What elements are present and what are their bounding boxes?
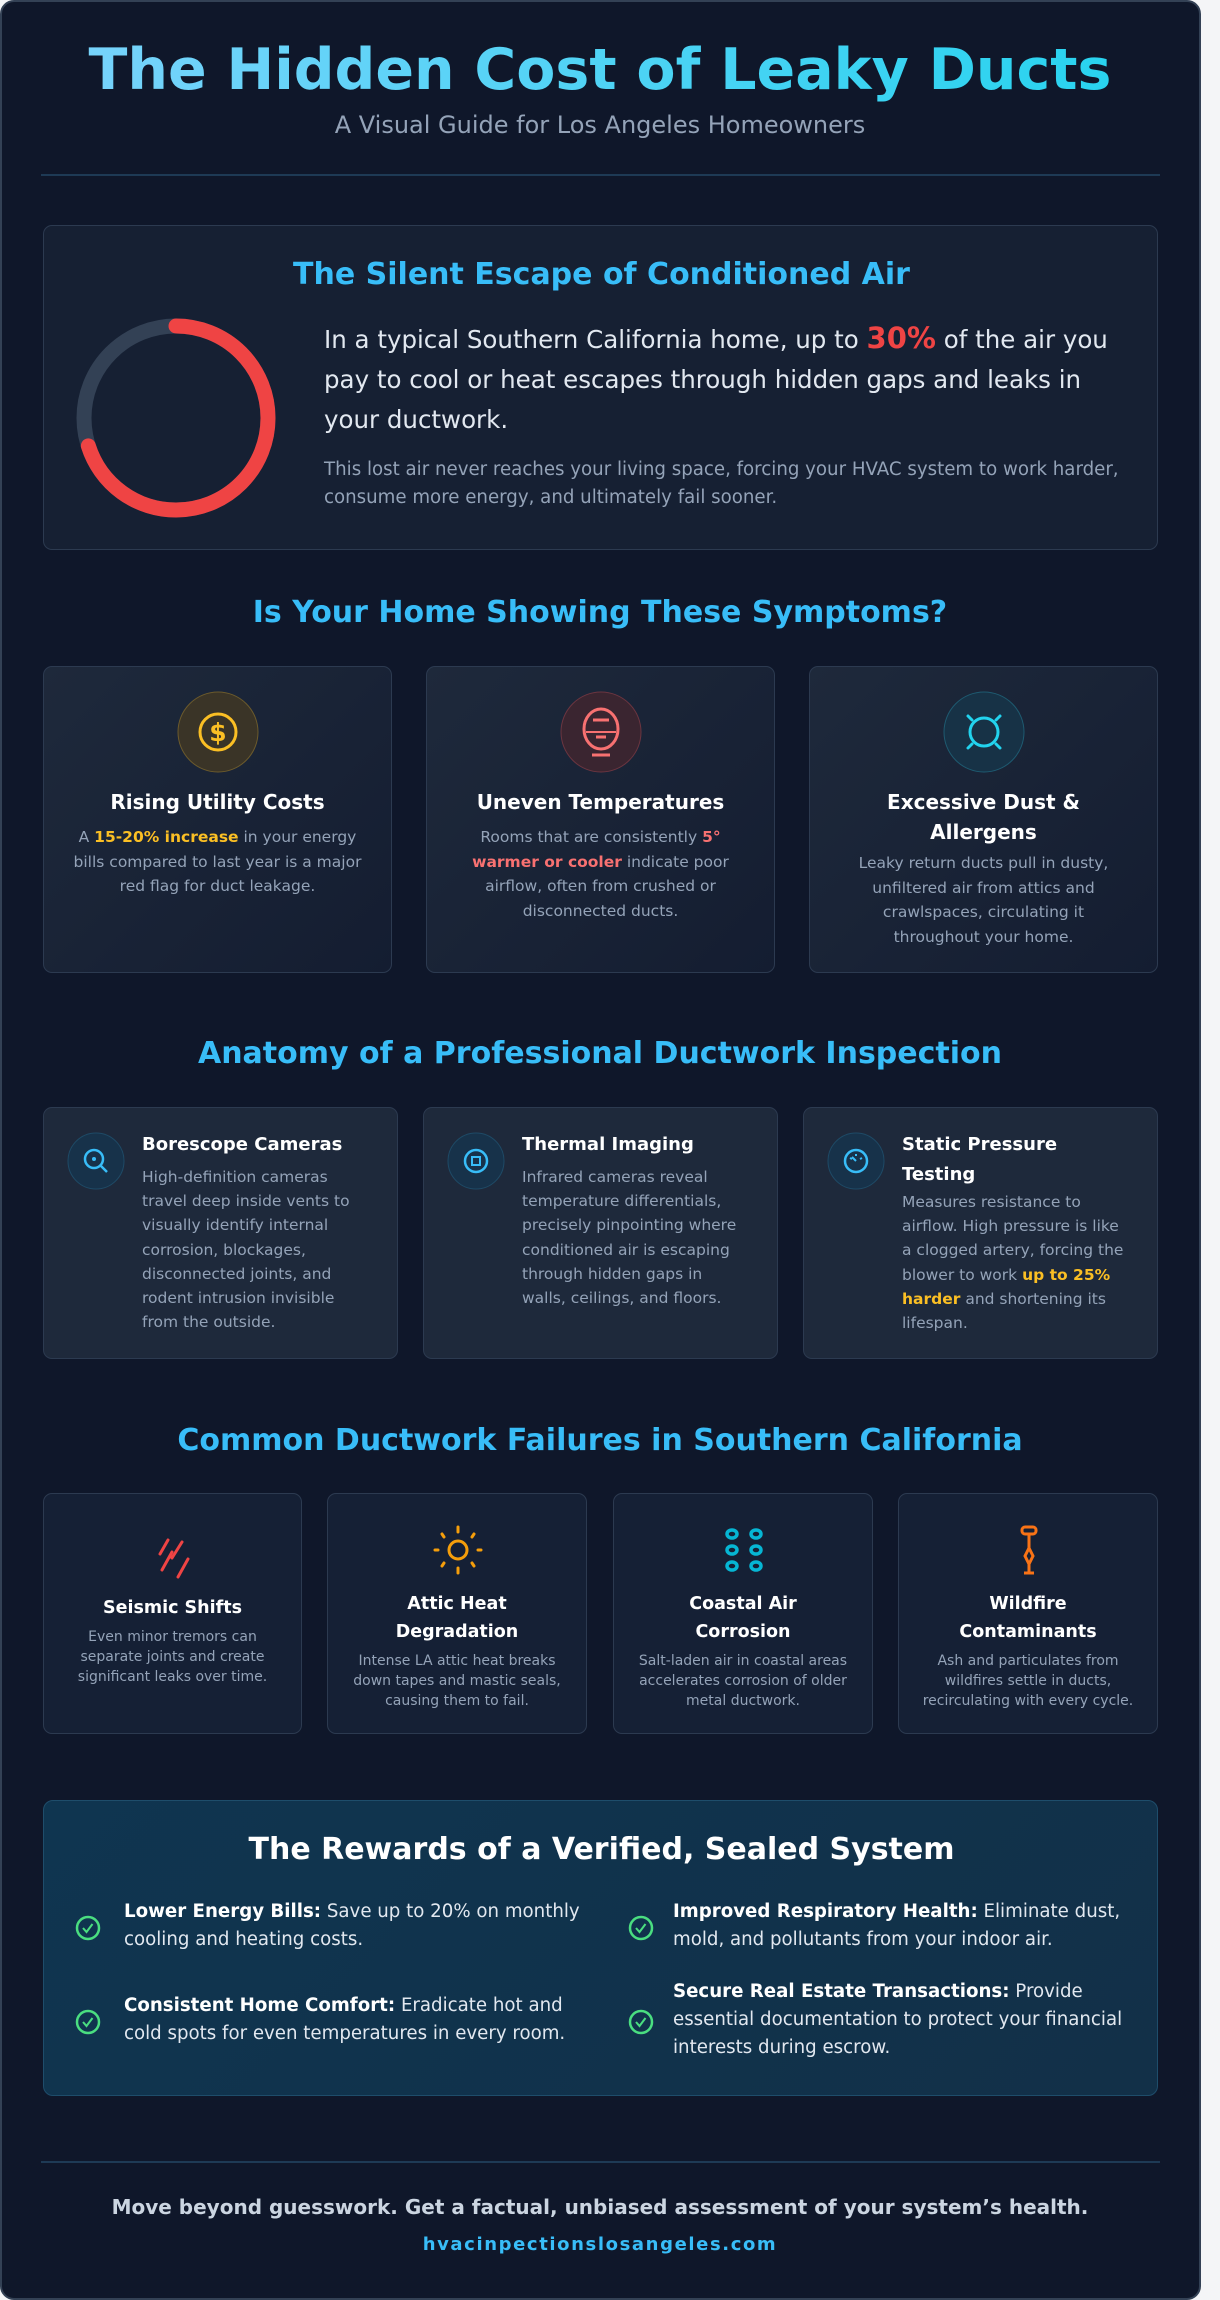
- icon: coastal: [725, 1528, 763, 1572]
- panel: rewards: [43, 1800, 1158, 2096]
- footer text: Move beyond guesswork. Get a factual, unbiased assessment of your system’s health.: [112, 2195, 1088, 2219]
- icon: dollar: [178, 692, 258, 772]
- panel: seismic: [43, 1493, 302, 1734]
- icon: magnifier: [68, 1132, 124, 1190]
- panel: rising utility costs: [43, 666, 392, 973]
- panel: static pressure: Measures resistance to airflow. High pressure is like a clogged artery, forcing the blower to work up to 25% harder and shortening its lifespan.: [902, 1193, 1123, 1332]
- panel: attic heat: Attic Heat: [407, 1594, 507, 1614]
- panel: borescope: High-definition cameras travel deep inside vents to visually identify internal corrosion, blockages, disconnected joints, and rodent intrusion invisible from the outside.: [142, 1168, 350, 1331]
- panel: coastal: Salt-laden air in coastal areas accelerates corrosion of older metal ductwork.: [639, 1653, 847, 1709]
- secondary text: This lost air never reaches your living space, forcing your HVAC system to work harder, consume more energy, and ultimately fail sooner.: [324, 459, 1119, 508]
- icon: thermal: [448, 1132, 504, 1190]
- main text: In a typical Southern California home, up to 30% of the air you pay to cool or heat escapes through hidden gaps and leaks in your ductwork.: [324, 321, 1108, 434]
- reward: respiratory: Improved Respiratory Health: Eliminate dust, mold, and pollutants from your indoor air.: [673, 1901, 1120, 1950]
- panel: dust: Leaky return ducts pull in dusty, unfiltered air from attics and crawlspaces, circulating it throughout your home.: [859, 854, 1108, 946]
- panel: wildfire: Ash and particulates from wildfires settle in ducts, recirculating with every cycle.: [923, 1653, 1133, 1709]
- icon: torch: [1020, 1526, 1038, 1574]
- heading: rewards: The Rewards of a Verified, Sealed System: [248, 1832, 954, 1867]
- icon: dust: [944, 692, 1024, 772]
- panel: attic heat: [327, 1493, 587, 1734]
- icon: thermostat: [560, 692, 642, 772]
- icon: seismic: [158, 1538, 190, 1579]
- reward: comfort: Consistent Home Comfort: Eradicate hot and cold spots for even temperatures in every room.: [124, 1995, 565, 2044]
- heading: symptoms: Is Your Home Showing These Symptoms?: [253, 595, 947, 630]
- panel: dust: Excessive Dust &: [887, 790, 1080, 814]
- subtitle: A Visual Guide for Los Angeles Homeowners: [335, 111, 865, 139]
- panel: static pressure: Static Pressure: [902, 1134, 1057, 1155]
- heading: failures: Common Ductwork Failures in Southern California: [177, 1423, 1023, 1458]
- panel: wildfire: Contaminants: [959, 1622, 1097, 1642]
- panel: seismic: Seismic Shifts: [103, 1598, 242, 1618]
- panel: attic heat: Degradation: [396, 1622, 518, 1642]
- panel: thermal: [423, 1107, 778, 1359]
- panel: attic heat: Intense LA attic heat breaks down tapes and mastic seals, causing them to fail.: [353, 1653, 561, 1709]
- panel: dust: Allergens: [930, 820, 1037, 844]
- panel: uneven temperatures: Uneven Temperatures: [477, 790, 724, 814]
- panel: static pressure: [803, 1107, 1158, 1359]
- icon: gauge: [828, 1132, 884, 1190]
- panel: wildfire: Wildfire: [989, 1594, 1067, 1614]
- heading: anatomy: Anatomy of a Professional Ductwork Inspection: [198, 1036, 1002, 1071]
- panel: coastal: [613, 1493, 873, 1734]
- panel: silent escape: [43, 225, 1158, 550]
- donut chart: [76, 318, 276, 518]
- title: The Hidden Cost of Leaky Ducts: [89, 37, 1111, 103]
- footer url: hvacinpectionslosangeles.com: [423, 2234, 777, 2255]
- panel: wildfire: [898, 1493, 1158, 1734]
- panel: static pressure: Testing: [902, 1164, 975, 1185]
- panel: dust: [809, 666, 1158, 973]
- panel: coastal: Coastal Air: [689, 1594, 797, 1614]
- reward: energy bills: Lower Energy Bills: Save up to 20% on monthly cooling and heating costs.: [124, 1901, 580, 1950]
- panel: thermal: Thermal Imaging: [522, 1134, 694, 1155]
- panel: thermal: Infrared cameras reveal temperature differentials, precisely pinpointing where conditioned air is escaping through hidden gaps in walls, ceilings, and floors.: [522, 1168, 736, 1307]
- reward: real estate: Secure Real Estate Transactions: Provide essential documentation to protect your financial interests during escrow.: [673, 1981, 1122, 2058]
- icon: sun: [434, 1526, 482, 1574]
- panel: uneven temperatures: [426, 666, 775, 973]
- panel: borescope: [43, 1107, 398, 1359]
- panel: seismic: Even minor tremors can separate joints and create significant leaks over time.: [78, 1629, 267, 1685]
- heading: silent escape: The Silent Escape of Conditioned Air: [293, 257, 910, 292]
- panel: rising utility costs: A 15-20% increase in your energy bills compared to last year is a major red flag for duct leakage.: [74, 828, 361, 895]
- icon: dollar: $: [209, 718, 227, 747]
- panel: borescope: Borescope Cameras: [142, 1134, 342, 1155]
- panel: rising utility costs: Rising Utility Costs: [110, 790, 325, 814]
- panel: uneven temperatures: Rooms that are consistently 5° warmer or cooler indicate poor airflow, often from crushed or disconnected ducts.: [472, 828, 729, 920]
- panel: coastal: Corrosion: [695, 1622, 791, 1642]
